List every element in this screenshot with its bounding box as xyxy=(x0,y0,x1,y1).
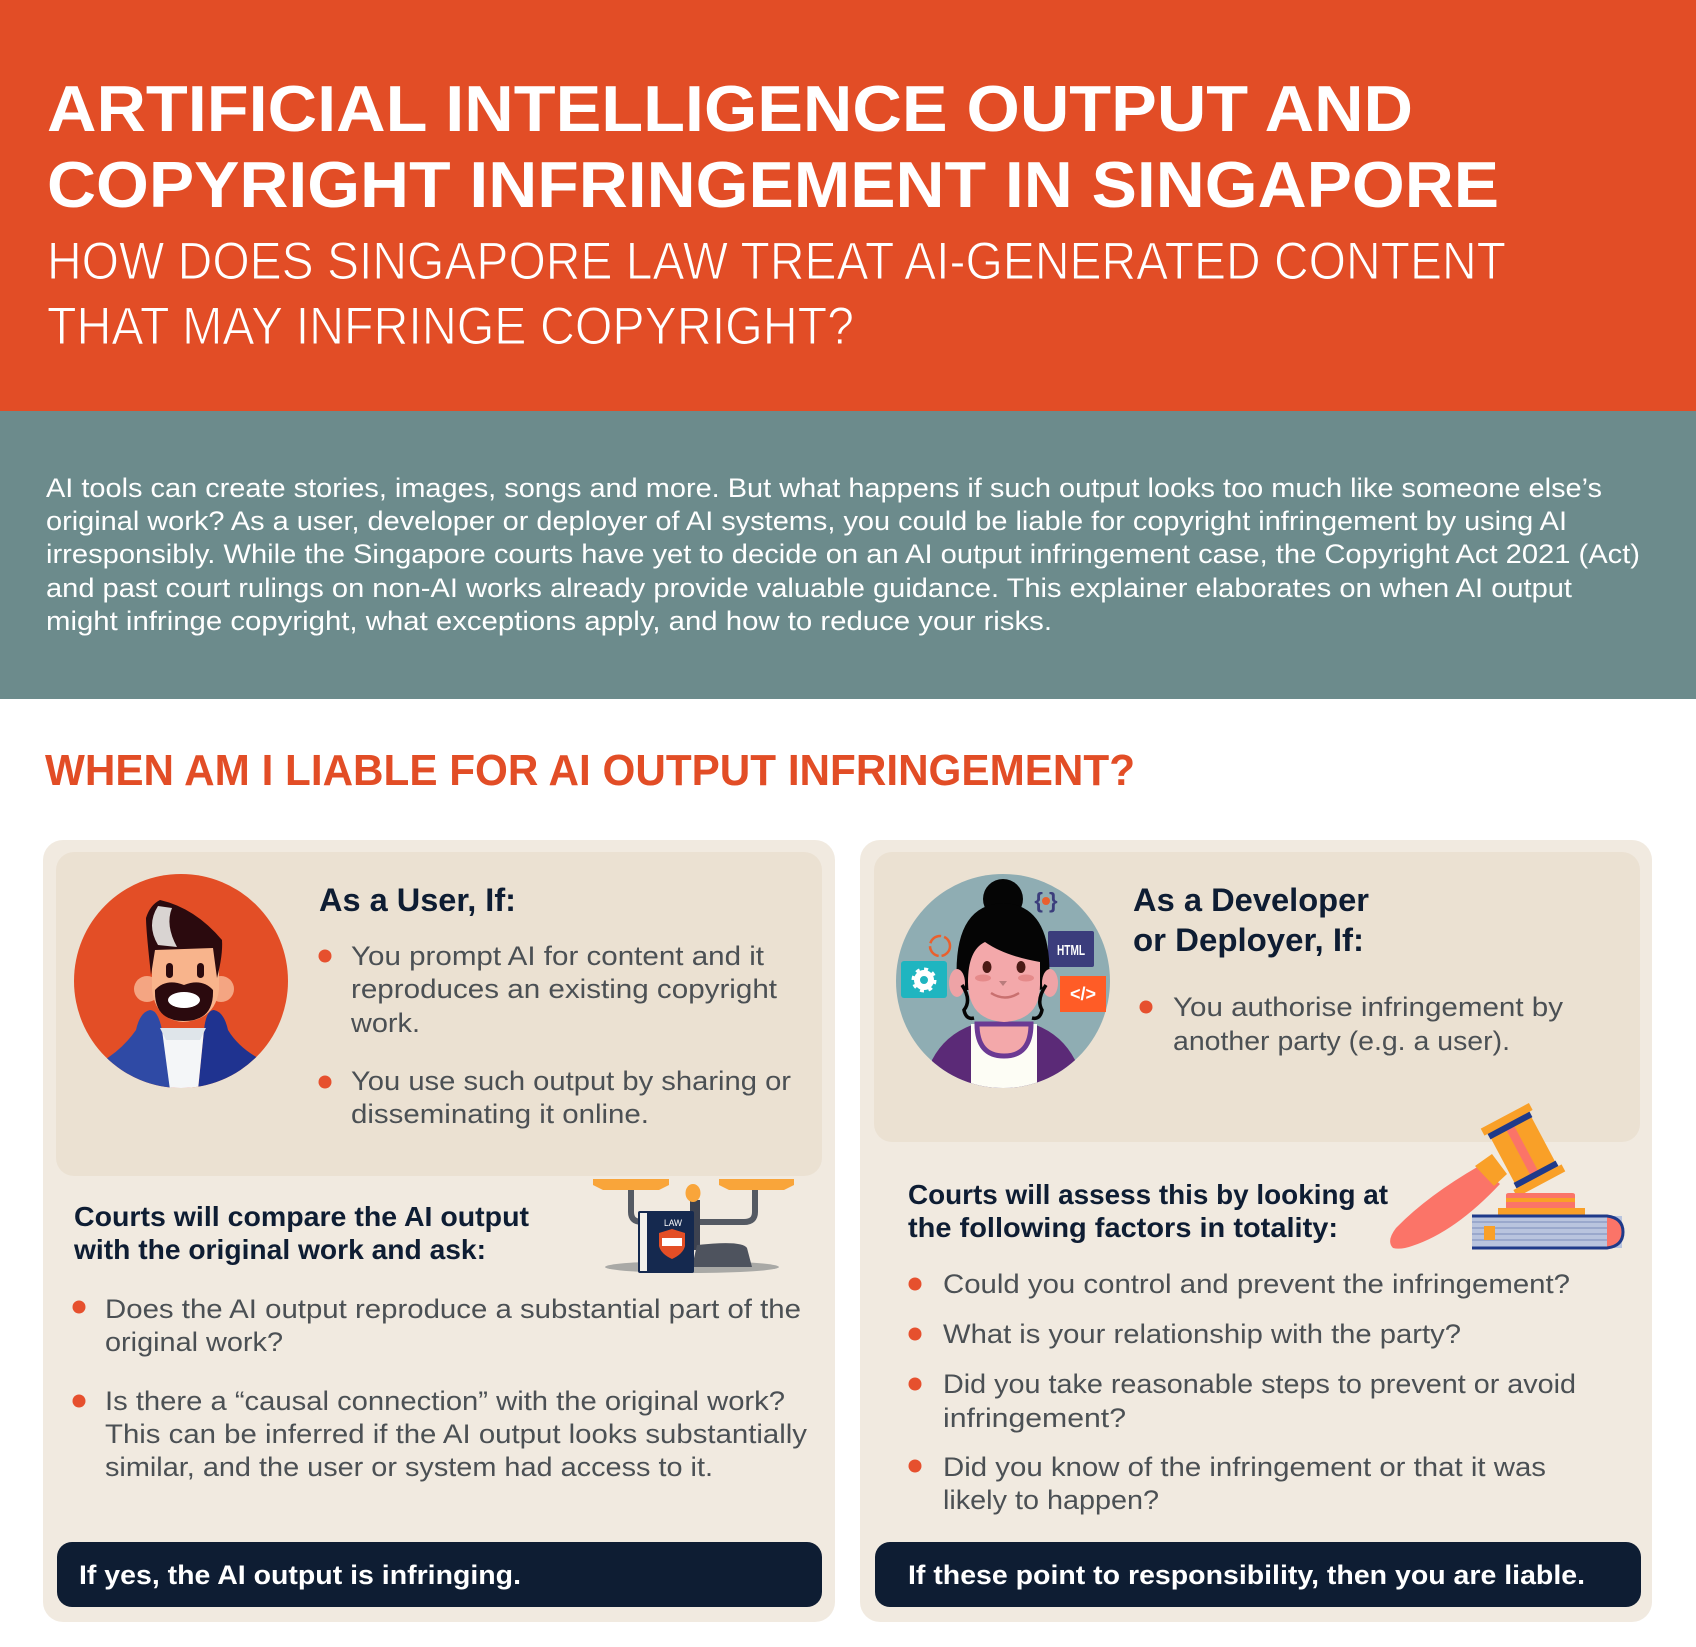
title xyxy=(47,72,1499,221)
bullet list: court questions: Is there a “causal connection” with the original work? xyxy=(105,1386,785,1416)
bullet list: assessment factors: What is your relationship with the party? xyxy=(943,1319,1461,1349)
panel: developer liability xyxy=(860,840,1652,1622)
bullet list: developer actions: You authorise infringement by xyxy=(1173,992,1564,1022)
subheading: court comparison: with the original work and ask: xyxy=(73,1234,486,1265)
icon: woman developer avatar: { } xyxy=(1034,888,1058,913)
icon: law book and scales: LAW xyxy=(664,1218,682,1228)
bullet list: user actions: reproduces an existing copyright xyxy=(351,974,778,1004)
header banner xyxy=(0,0,1696,411)
icon: woman developer avatar: </> xyxy=(1070,984,1096,1004)
icon: law book and scales xyxy=(593,1179,794,1273)
intro panel xyxy=(0,411,1696,699)
subtitle: THAT MAY INFRINGE COPYRIGHT? xyxy=(47,297,854,356)
callout: infringing output: If yes, the AI output is infringing. xyxy=(79,1560,521,1590)
intro text: original work? As a user, developer or deployer of AI systems, you could be liable for copyright infringement by using AI xyxy=(46,506,1567,536)
bullet list: assessment factors: infringement? xyxy=(943,1403,1126,1433)
callout: liability result: If these point to responsibility, then you are liable. xyxy=(908,1560,1585,1590)
intro text: irresponsibly. While the Singapore courts have yet to decide on an AI output infringement case, the Copyright Act 2021 (Act) xyxy=(46,539,1640,569)
bullet list: user actions: disseminating it online. xyxy=(351,1099,649,1129)
bullet list: user actions: You use such output by sharing or xyxy=(351,1066,791,1096)
heading: as a developer or deployer xyxy=(1133,882,1369,958)
heading: as a developer or deployer: or Deployer, If: xyxy=(1133,922,1364,958)
bullet list: court questions xyxy=(72,1294,808,1482)
icon: gavel on book xyxy=(1390,1103,1623,1249)
icon: bearded man avatar xyxy=(74,874,288,1090)
subheading: court comparison xyxy=(73,1201,529,1265)
callout: infringing output xyxy=(57,1542,822,1607)
bullet list: assessment factors: Did you take reasonable steps to prevent or avoid xyxy=(943,1369,1576,1399)
bullet list: assessment factors: Did you know of the infringement or that it was xyxy=(943,1452,1546,1482)
bullet list: court questions: This can be inferred if the AI output looks substantially xyxy=(105,1419,808,1449)
bullet list: assessment factors: likely to happen? xyxy=(943,1485,1159,1515)
bullet list: court questions: Does the AI output reproduce a substantial part of the xyxy=(105,1294,801,1324)
bullet list: developer actions xyxy=(1140,992,1564,1056)
section heading: WHEN AM I LIABLE FOR AI OUTPUT INFRINGEMENT? xyxy=(45,746,1135,795)
bullet list: user actions xyxy=(318,941,791,1129)
bullet list: user actions: You prompt AI for content and it xyxy=(351,941,765,971)
subheading: court assessment: Courts will assess this by looking at xyxy=(908,1179,1388,1210)
intro text: might infringe copyright, what exceptions apply, and how to reduce your risks. xyxy=(46,606,1052,636)
intro text: AI tools can create stories, images, songs and more. But what happens if such output looks too much like someone else’s xyxy=(46,473,1602,503)
subtitle: HOW DOES SINGAPORE LAW TREAT AI-GENERATED CONTENT xyxy=(47,232,1506,291)
bullet list: court questions: similar, and the user or system had access to it. xyxy=(105,1452,713,1482)
bullet list: court questions: original work? xyxy=(105,1327,283,1357)
heading: as a developer or deployer: As a Developer xyxy=(1133,882,1369,918)
icon: woman developer avatar xyxy=(896,874,1110,1090)
panel: user liability xyxy=(43,840,835,1622)
title: ARTIFICIAL INTELLIGENCE OUTPUT AND xyxy=(47,72,1413,145)
subheading: court assessment xyxy=(908,1179,1388,1243)
bullet list: user actions: work. xyxy=(350,1008,420,1038)
callout: liability result xyxy=(875,1542,1641,1607)
panel: user conditions xyxy=(56,852,822,1176)
intro text xyxy=(46,473,1640,636)
icon: woman developer avatar: HTML xyxy=(1057,942,1085,959)
bullet list: assessment factors xyxy=(908,1269,1576,1515)
heading: as a user: As a User, If: xyxy=(319,882,516,918)
subtitle xyxy=(47,232,1506,356)
subheading: court comparison: Courts will compare the AI output xyxy=(74,1201,529,1232)
panel: developer conditions xyxy=(874,852,1640,1142)
bullet list: developer actions: another party (e.g. a user). xyxy=(1173,1026,1510,1056)
bullet list: assessment factors: Could you control and prevent the infringement? xyxy=(943,1269,1570,1299)
subheading: court assessment: the following factors in totality: xyxy=(908,1212,1338,1243)
title: COPYRIGHT INFRINGEMENT IN SINGAPORE xyxy=(47,148,1499,221)
intro text: and past court rulings on non-AI works already provide valuable guidance. This explainer elaborates on when AI output xyxy=(46,573,1573,603)
